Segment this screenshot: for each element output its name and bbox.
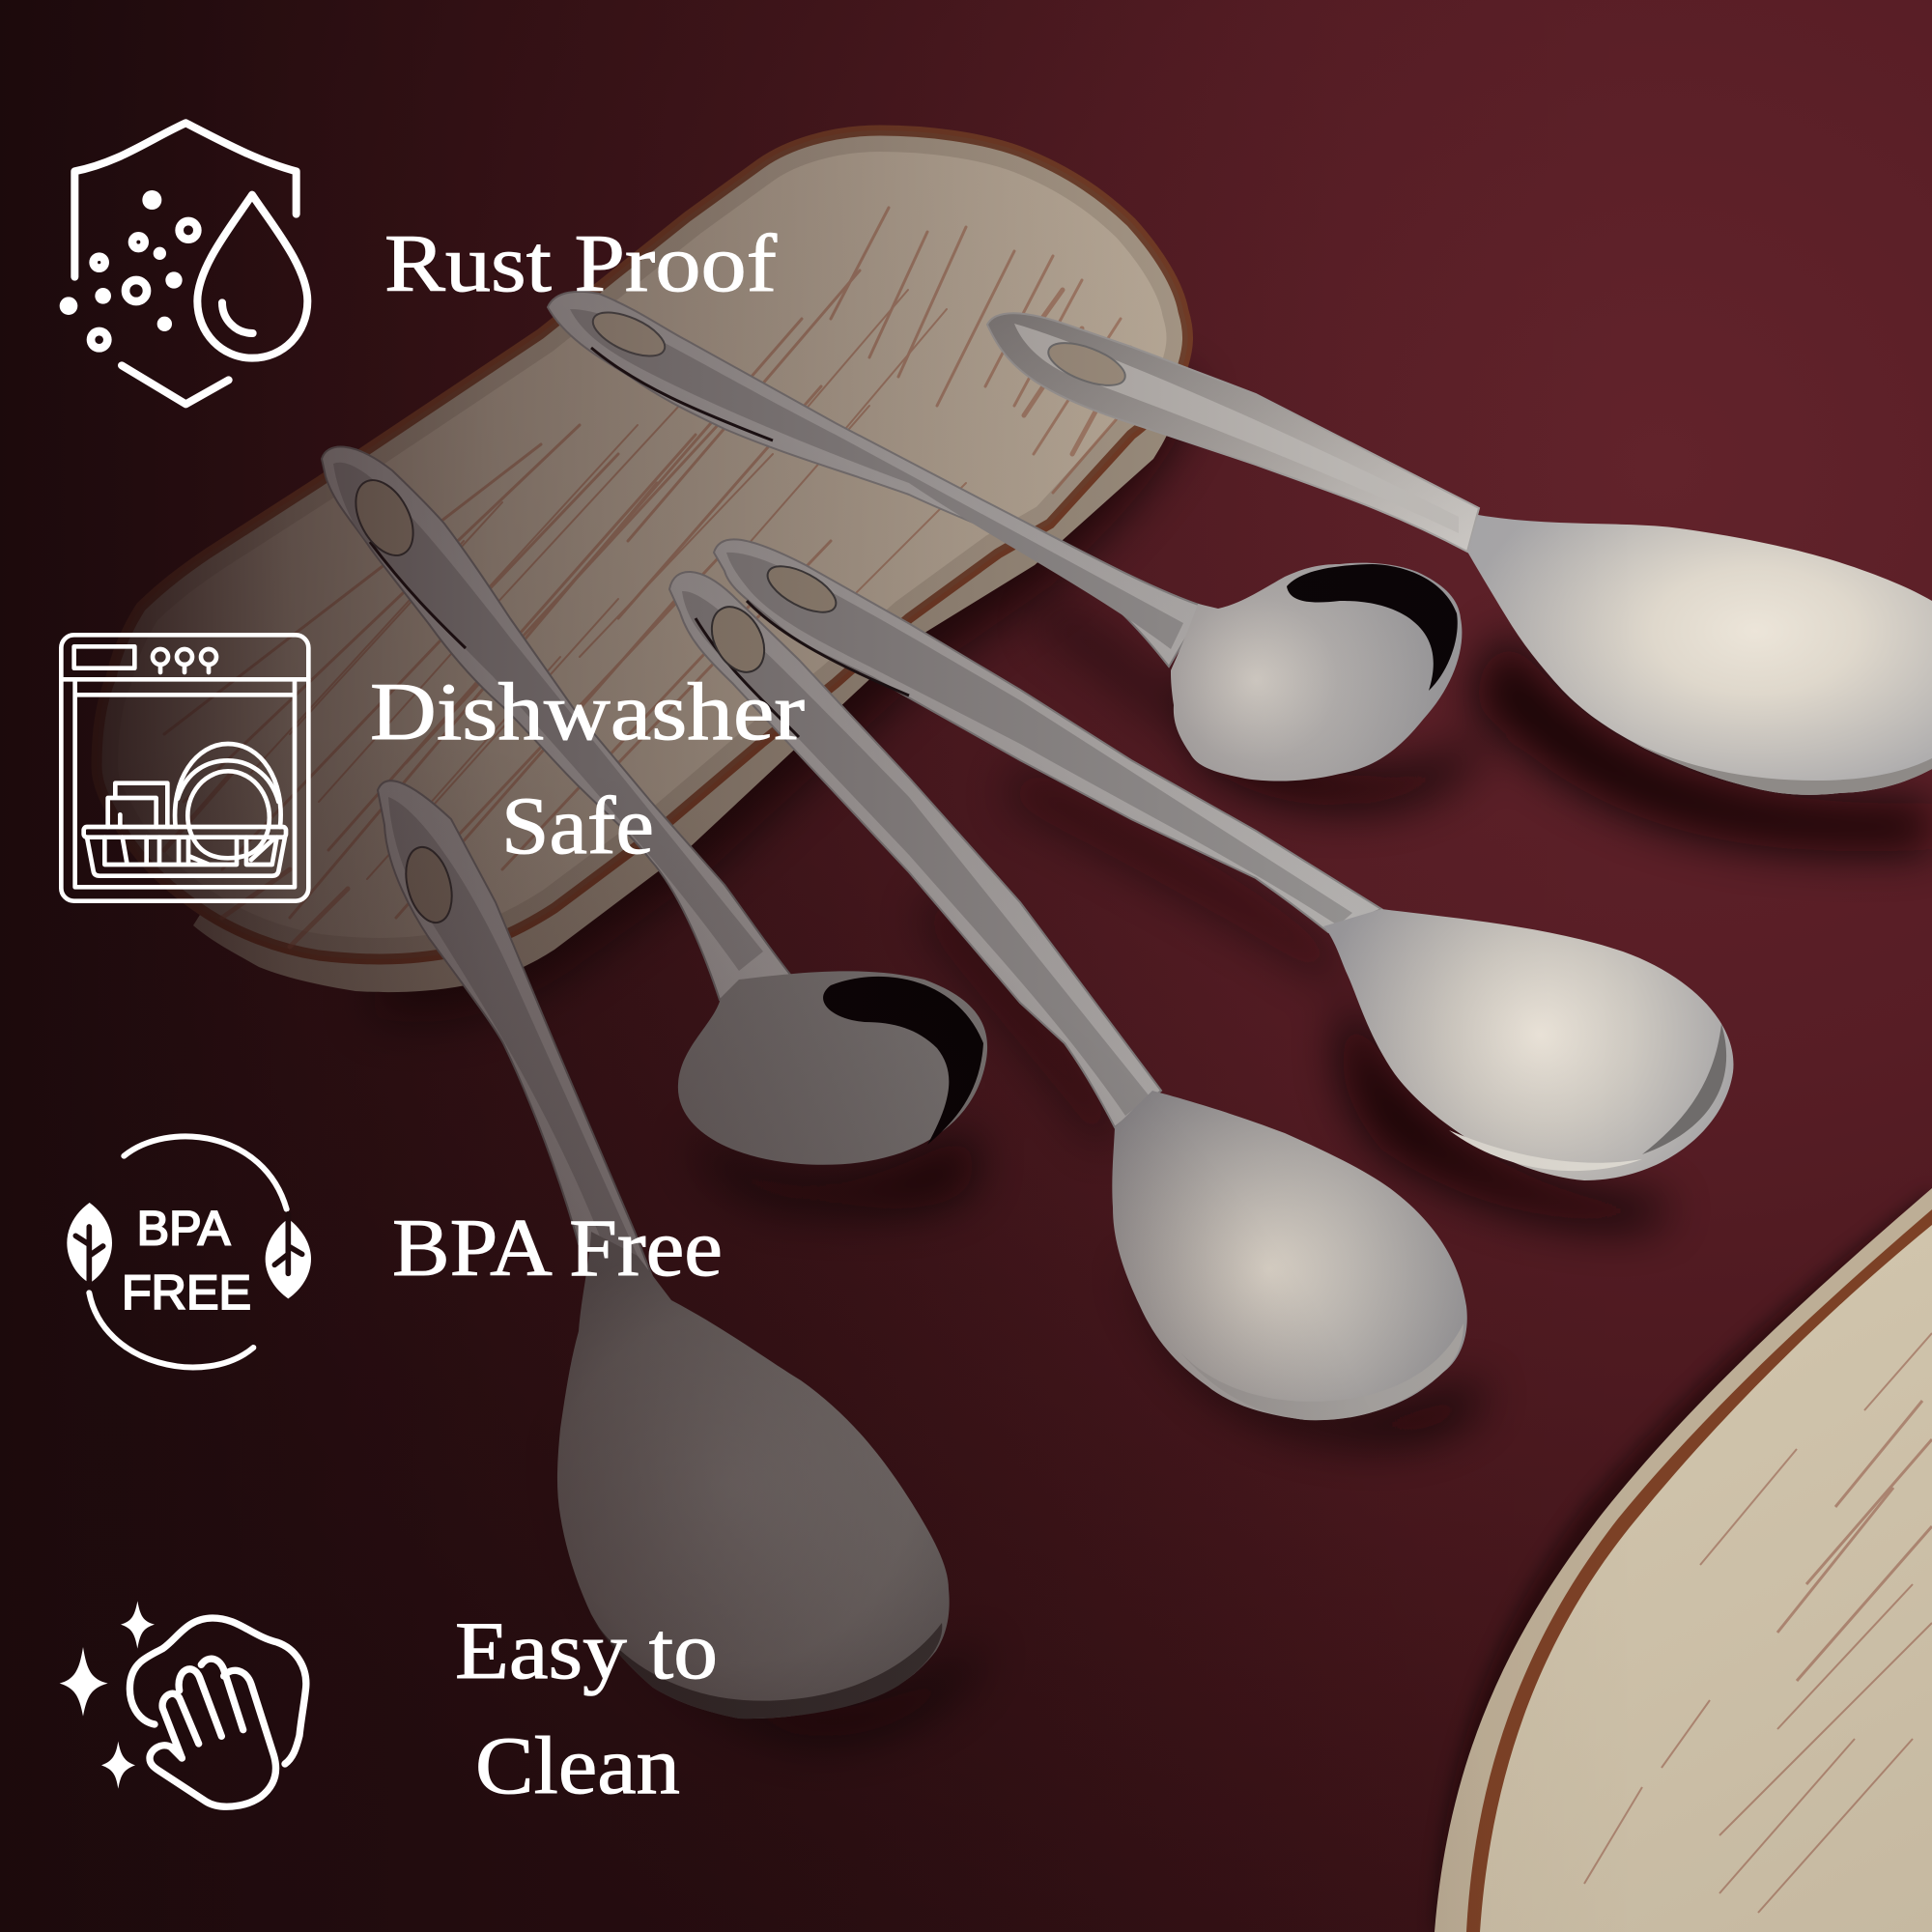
label: Rust Proof: Rust Proof <box>384 218 778 309</box>
lower darkening overlay <box>0 676 1546 1932</box>
label: Easy to Clean: Easy to <box>455 1605 718 1696</box>
spoon: left ladle <box>322 446 987 1165</box>
icon: rust proof shield and droplet <box>60 123 307 404</box>
spoon: lower centre serving spoon <box>669 572 1467 1420</box>
label: BPA Free: BPA Free <box>392 1203 723 1293</box>
spoon: top centre ladle <box>548 292 1462 781</box>
shadow under tray <box>367 338 1193 1022</box>
label: Dishwasher Safe: Safe <box>501 781 654 871</box>
spoon: front serving spoon <box>378 781 950 1719</box>
brush strokes on platter <box>1584 1333 1932 1913</box>
icon: hand wiping with sparkles <box>60 1601 306 1806</box>
icon: dishwasher <box>61 635 308 901</box>
serving platter, bottom right <box>1435 1188 1932 1932</box>
label: Dishwasher Safe <box>370 667 805 871</box>
label: Easy to Clean <box>455 1605 718 1811</box>
label: Easy to Clean: Clean <box>475 1720 680 1811</box>
spoon: top right serving spoon <box>987 313 1932 795</box>
tray plate, top left <box>97 130 1188 992</box>
icon: BPA free badge: BPA <box>137 1201 231 1255</box>
spoon shadows <box>569 599 1932 1741</box>
icon: BPA free badge <box>67 1136 311 1367</box>
brush strokes on tray <box>97 130 1188 959</box>
spoon: far centre serving spoon <box>714 539 1733 1180</box>
label: Dishwasher Safe: Dishwasher <box>370 667 805 757</box>
icon: BPA free badge: FREE <box>122 1265 251 1320</box>
